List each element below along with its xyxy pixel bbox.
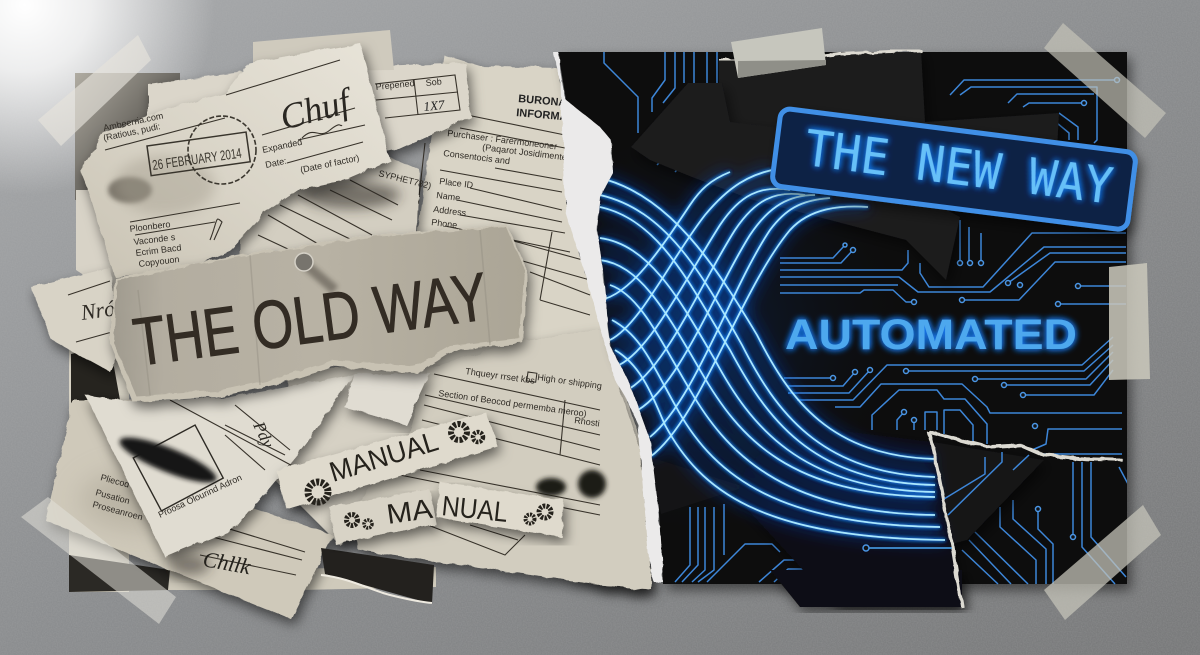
white torn edge of lower right piece <box>929 432 1122 607</box>
icon: gears <box>308 424 483 502</box>
top white torn edge <box>719 50 921 60</box>
tape: top <box>253 30 394 72</box>
bottom-left burnt paper with signature: Pusation <box>94 487 131 506</box>
small note with handwriting: Nró <box>78 295 117 325</box>
paper behind lower pile <box>275 365 440 545</box>
badge: the new way <box>772 108 1136 230</box>
bottom-left burnt paper with signature: Chllk <box>201 546 254 579</box>
panel: the new way circuit board <box>553 23 1166 620</box>
lower section form <box>355 330 652 590</box>
form: burona information: Name <box>436 190 461 203</box>
torn black pieces <box>631 50 1059 607</box>
white torn paper edge <box>553 52 663 582</box>
upper torn table sheet: Sob <box>425 76 442 88</box>
torn receipt with stamp and signature: Ploonbero <box>129 219 171 234</box>
cardboard sign: the old way <box>110 225 527 402</box>
lower section form: Rhosti <box>574 415 600 429</box>
crumpled white note with ink stain <box>85 374 354 557</box>
torn receipt with stamp and signature: Ecrim Bacd <box>135 242 182 258</box>
stamp <box>147 116 256 184</box>
form: burona information: Purchaser : Farermoneoner <box>447 128 558 151</box>
circuit nodes <box>830 78 1120 540</box>
form: burona information: (Paqarot Josidimente o <box>482 142 575 163</box>
stamp: 26 FEBRUARY 2014 <box>151 145 243 173</box>
torn receipt with stamp and signature: Copyouon <box>138 254 180 269</box>
middle lined form <box>240 140 432 290</box>
form: burona information: BURONA <box>518 93 567 109</box>
black torn scrap <box>321 548 434 604</box>
form: burona information: INFORMA <box>516 107 568 123</box>
tape: top right <box>1044 23 1166 138</box>
torn receipt with stamp and signature: Vaconde s <box>133 232 176 247</box>
crumpled white note with ink stain: Proosa Olourind Adron <box>157 472 243 520</box>
dark board <box>558 52 1127 584</box>
heading: the old way: THE OLD WAY <box>129 258 492 381</box>
torn receipt with stamp and signature: Expanded <box>261 137 303 155</box>
form: burona information: Place ID <box>439 176 474 190</box>
torn receipt with stamp and signature: (Ratious, pudi: <box>102 121 161 143</box>
crumpled white note with ink stain: Pdy <box>249 418 278 451</box>
tape: bottom left <box>21 497 176 624</box>
torn receipt with stamp and signature: Ambeerria.com <box>102 110 164 133</box>
form: burona information <box>415 55 652 590</box>
upper torn table sheet <box>148 63 471 175</box>
small scrap <box>344 373 430 425</box>
strip: manual 1: MANUAL <box>326 425 442 488</box>
small note with handwriting <box>31 268 120 372</box>
strip: manual 2 <box>329 490 436 544</box>
middle lined form: SYPHET782) <box>378 168 432 191</box>
lower section form: High or shipping <box>537 372 603 391</box>
pin <box>295 253 335 290</box>
bottom-left burnt paper with signature <box>45 400 333 619</box>
neon terminal line <box>863 545 952 551</box>
torn receipt with stamp and signature: Date: <box>264 156 287 170</box>
strip: manual 3 <box>436 482 564 537</box>
form: burona information: Consentocis and <box>443 148 511 166</box>
black piece below the board <box>770 570 962 607</box>
left back paper <box>76 190 122 300</box>
strip: manual 2: MA <box>385 493 435 530</box>
circuit traces <box>604 52 1128 584</box>
icon: gears <box>526 506 551 524</box>
icon: gears <box>346 514 372 528</box>
lower section form: Section of Beocod permemba meroo) <box>438 388 587 419</box>
heading: the new way: THE NEW WAY <box>801 119 1116 216</box>
form: burona information: Phone <box>431 217 458 230</box>
torn receipt with stamp and signature: (Date of factor) <box>299 153 360 175</box>
tape: bottom right <box>1044 505 1161 620</box>
torn receipt with stamp and signature: Chuf <box>276 80 359 138</box>
tape: right <box>1109 263 1150 380</box>
upper torn table sheet: 1X7 <box>423 97 446 114</box>
neon wave bundle <box>600 170 945 540</box>
bottom-left burnt paper with signature: Proseanroen <box>91 499 144 522</box>
strip: manual 1 <box>276 412 498 509</box>
strip: manual 3: NUAL <box>440 490 509 528</box>
torn receipt with stamp and signature <box>80 43 390 277</box>
tape: top left <box>38 35 151 146</box>
panel: the old way paper pile <box>21 30 652 624</box>
tape: top center <box>731 28 826 78</box>
heading: automated: AUTOMATED <box>785 311 1077 359</box>
form: burona information: Address <box>433 204 467 218</box>
lower section form: Thqueyr rrset kbs <box>465 366 536 386</box>
upper torn table sheet: Prepened <box>375 78 415 92</box>
bottom-left burnt paper with signature: Pliecod <box>99 472 131 490</box>
back photo sheet <box>69 73 436 592</box>
